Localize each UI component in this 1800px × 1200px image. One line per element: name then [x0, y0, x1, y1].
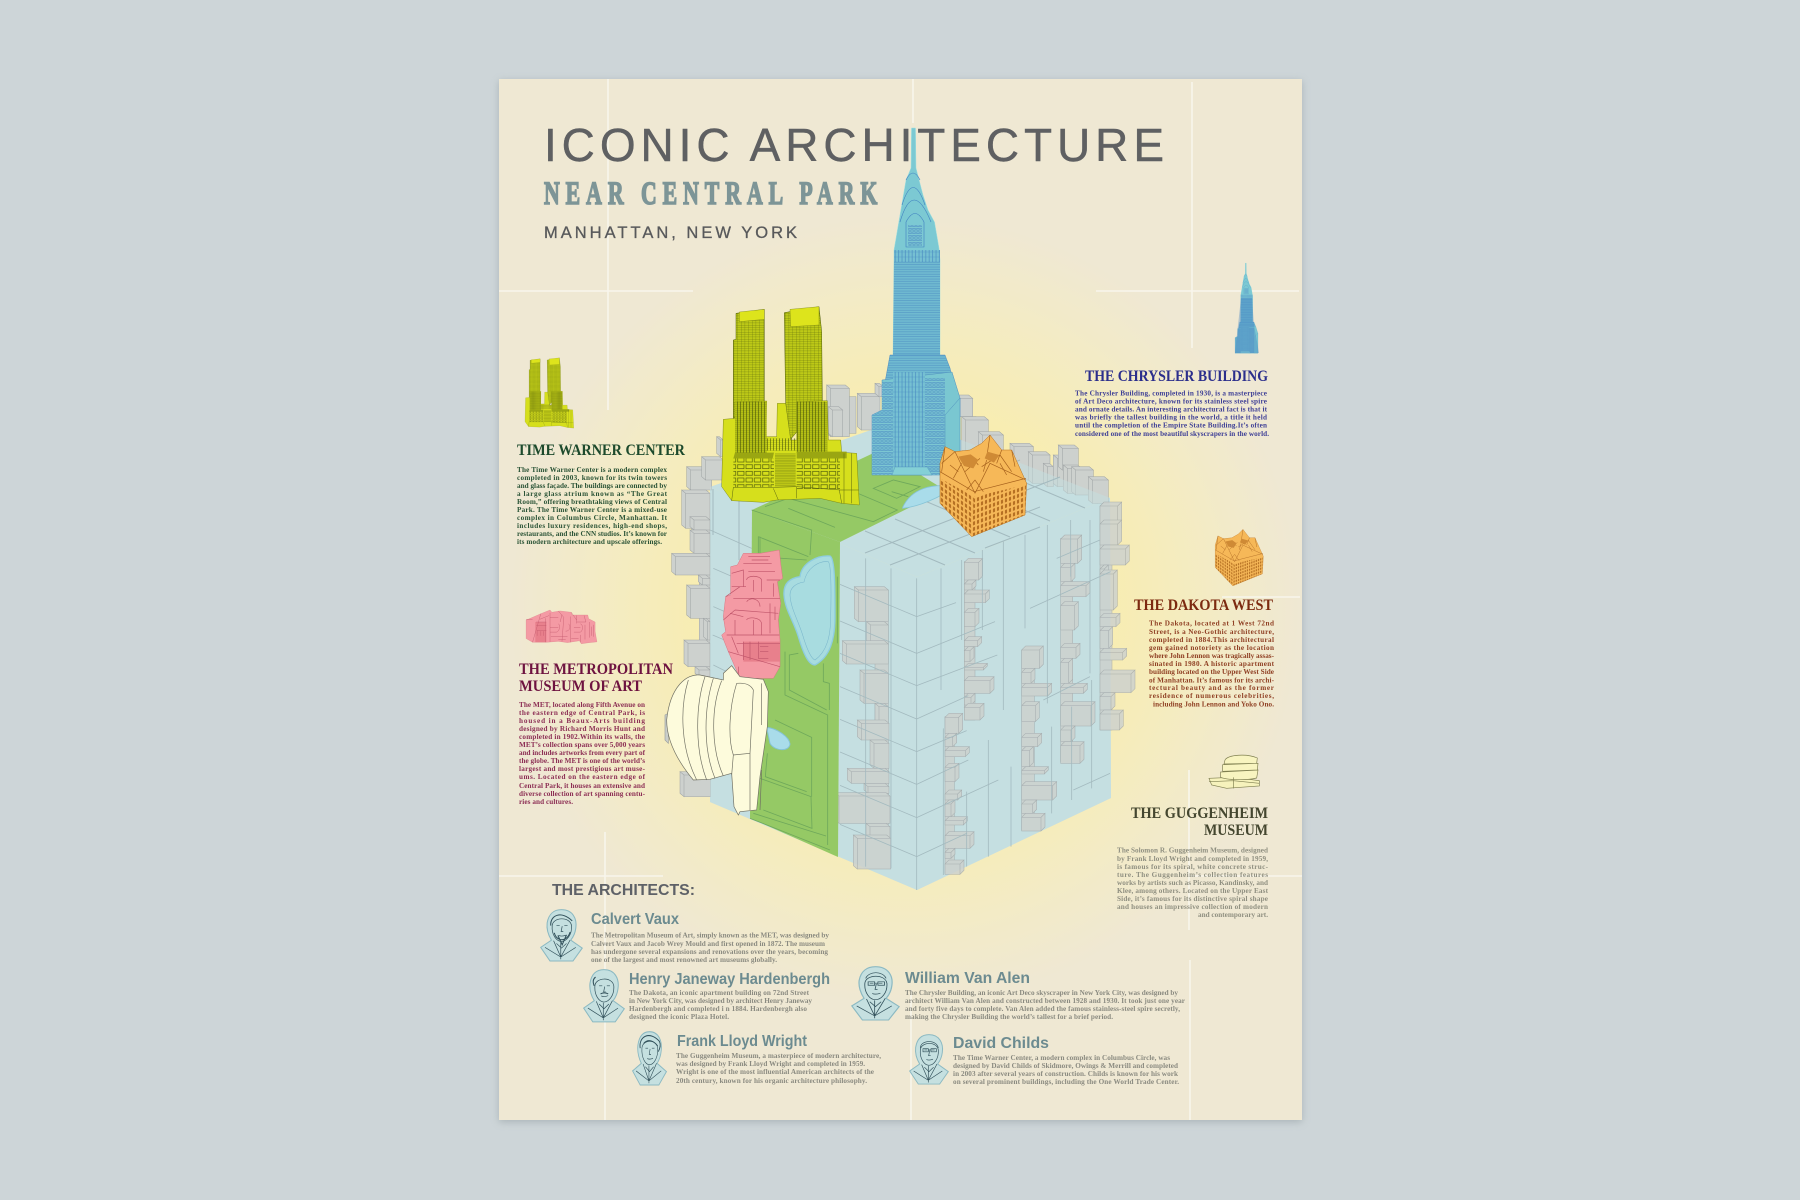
text: The Dakota description: of Manhattan. It’s famous for its archi-: [1149, 676, 1275, 684]
text: Henry Janeway Hardenbergh bio: The Dakota, an iconic apartment building on 72nd Street: [629, 989, 810, 997]
text: Guggenheim Museum description: works by artists such as Picasso, Kandinsky, and: [1117, 879, 1268, 887]
text: David Childs bio: The Time Warner Center, a modern complex in Columbus Circle, was: [953, 1054, 1170, 1062]
portrait: Henry Janeway Hardenbergh: [584, 970, 624, 1022]
name: David Childs: David Childs: [953, 1035, 1049, 1052]
text: Time Warner Center description: complex in Columbus Circle, Manhattan. It: [517, 514, 668, 522]
text: Frank Lloyd Wright bio: 20th century, known for his organic architecture philosophy.: [676, 1077, 867, 1085]
text: The Dakota description: The Dakota, located at 1 West 72nd: [1149, 620, 1274, 628]
text: Chrysler Building description: of Art Deco architecture, known for its stainless steel spire: [1075, 398, 1267, 406]
subtitle: NEAR CENTRAL PARK: [544, 176, 878, 212]
building: Guggenheim Museum: [665, 666, 768, 815]
text: Metropolitan Museum description: Central Park, it houses an extensive and: [519, 782, 645, 790]
text: Frank Lloyd Wright bio: Wright is one of the most influential American architects of the: [676, 1068, 874, 1076]
name: Calvert Vaux: Calvert Vaux: [591, 911, 679, 928]
panel: The Dakota West: [1134, 529, 1275, 708]
heading: Chrysler Building: THE CHRYSLER BUILDING: [1085, 368, 1268, 385]
heading: Guggenheim Museum: MUSEUM: [1204, 822, 1268, 839]
text: Time Warner Center description: its modern architecture and upscale offerings.: [517, 538, 662, 546]
text: Guggenheim Museum description: and contemporary art.: [1198, 911, 1268, 919]
text: Chrysler Building description: The Chrysler Building, completed in 1930, is a masterpiece: [1075, 390, 1267, 398]
gray buildings on right face: [835, 502, 1135, 874]
heading: Guggenheim Museum: [1131, 805, 1268, 839]
reservoir pond: [784, 556, 835, 665]
text: William Van Alen bio: [905, 989, 1186, 1021]
text: Guggenheim Museum description: by Frank Lloyd Wright and completed in 1959,: [1117, 855, 1268, 863]
text: Metropolitan Museum description: the globe. The MET is one of the world’s: [519, 757, 645, 765]
building: Chrysler Building: [872, 128, 960, 475]
heading: Time Warner Center: TIME WARNER CENTER: [517, 442, 685, 459]
heading: Metropolitan Museum of Art: [519, 661, 673, 695]
architect: William Van Alen: [852, 967, 1186, 1021]
text: William Van Alen bio: and forty five days to complete. Van Alen added the famous stainless-steel spire secretly,: [905, 1005, 1180, 1013]
icon: Chrysler Building: [1235, 263, 1259, 353]
text: The Dakota description: residence of numerous celebrities,: [1149, 692, 1274, 700]
text: Metropolitan Museum description: largest and most prestigious art muse-: [519, 765, 646, 773]
building: Time Warner Center: [722, 307, 859, 505]
text: Time Warner Center description: Park. The Time Warner Center is a mixed-use: [517, 506, 667, 514]
text: Metropolitan Museum description: completed in 1902.Within its walls, the: [519, 733, 645, 741]
location line: MANHATTAN, NEW YORK: [544, 224, 797, 242]
solid cube base: [710, 418, 1111, 890]
text: Time Warner Center description: a large glass atrium known as “The Great: [517, 490, 668, 498]
text: Time Warner Center description: completed in 2003, known for its twin towers: [517, 474, 667, 482]
name: Frank Lloyd Wright: Frank Lloyd Wright: [677, 1033, 807, 1050]
text: Henry Janeway Hardenbergh bio: in New York City, was designed by architect Henry Janeway: [629, 997, 812, 1005]
text: Time Warner Center description: restaurants, and the CNN studios. It’s known for: [517, 530, 668, 538]
text: David Childs bio: designed by David Childs of Skidmore, Owings & Merrill and completed: [953, 1062, 1178, 1070]
central park green strip: [750, 450, 945, 857]
text: Chrysler Building description: was briefly the tallest building in the world, a title it held: [1075, 414, 1267, 422]
text: Henry Janeway Hardenbergh bio: Hardenbergh and completed i n 1884. Hardenbergh also: [629, 1005, 807, 1013]
portrait: William Van Alen: [852, 967, 899, 1020]
text: Time Warner Center description: Room,” offering breathtaking views of Central: [517, 498, 667, 506]
heading: Guggenheim Museum: THE GUGGENHEIM: [1131, 805, 1268, 822]
title: ICONIC ARCHITECTURE: [544, 119, 1164, 171]
panel: Time Warner Center: [517, 358, 685, 546]
name: William Van Alen: William Van Alen: [905, 970, 1030, 987]
text: The Dakota description: gem gained notoriety as the location: [1149, 644, 1274, 652]
text: Time Warner Center description: includes luxury residences, high-end shops,: [517, 522, 667, 530]
text: David Childs bio: in 2003 after several years of construction. Childs is known for his work: [953, 1070, 1178, 1078]
text: Guggenheim Museum description: is famous for its spiral, white concrete struc-: [1117, 863, 1269, 871]
text: Metropolitan Museum description: diverse collection of art spanning centu-: [519, 790, 646, 798]
text: Guggenheim Museum description: The Solomon R. Guggenheim Museum, designed: [1117, 846, 1268, 854]
panel: Guggenheim Museum: [1117, 755, 1269, 919]
text: Metropolitan Museum description: designed by Richard Morris Hunt and: [519, 725, 645, 733]
heading: The Architects: THE ARCHITECTS:: [552, 882, 695, 899]
text: Calvert Vaux bio: Calvert Vaux and Jacob Wrey Mould and first opened in 1872. The museum: [591, 940, 825, 948]
text: Metropolitan Museum description: housed in a Beaux-Arts building: [519, 717, 645, 725]
text: Calvert Vaux bio: The Metropolitan Museum of Art, simply known as the MET, was designed by: [591, 932, 829, 940]
isometric city cube: [665, 128, 1135, 890]
back and edge gray buildings: [672, 383, 1108, 797]
heading: Metropolitan Museum of Art: MUSEUM OF ART: [519, 678, 642, 695]
text: Metropolitan Museum description: and includes artworks from every part of: [519, 749, 646, 757]
pond on top face: [903, 486, 953, 508]
text: Time Warner Center description: [517, 466, 668, 546]
text: Henry Janeway Hardenbergh bio: [629, 989, 812, 1021]
architect: Frank Lloyd Wright: [633, 1032, 881, 1085]
text: Guggenheim Museum description: Klee, among others. Located on the Upper East: [1117, 887, 1269, 895]
building: The Dakota: [940, 435, 1027, 537]
heading: Metropolitan Museum of Art: THE METROPOLITAN: [519, 661, 673, 678]
text: Metropolitan Museum description: ries and cultures.: [519, 798, 573, 806]
icon: Metropolitan Museum: [526, 610, 597, 644]
text: Metropolitan Museum description: [519, 701, 646, 806]
text: Chrysler Building description: until the completion of the Empire State Building.It’s often: [1075, 422, 1267, 430]
text: The Dakota description: tectural beauty and as the former: [1149, 684, 1275, 692]
text: Metropolitan Museum description: the eastern edge of Central Park, is: [519, 709, 645, 717]
text: William Van Alen bio: The Chrysler Building, an iconic Art Deco skyscraper in New York City, was designed by: [905, 989, 1178, 997]
text: Guggenheim Museum description: and houses an impressive collection of modern: [1117, 903, 1268, 911]
text: The Dakota description: [1149, 620, 1275, 708]
text: Frank Lloyd Wright bio: The Guggenheim Museum, a masterpiece of modern architecture,: [676, 1052, 881, 1060]
portrait: David Childs: [910, 1035, 948, 1084]
text: The Dakota description: Street, is a Neo-Gothic architecture,: [1149, 628, 1274, 636]
text: David Childs bio: [953, 1054, 1179, 1086]
panel: Metropolitan Museum of Art: [519, 610, 673, 806]
poster shadow: [499, 81, 1302, 1122]
text: Calvert Vaux bio: [591, 932, 829, 964]
text: Metropolitan Museum description: The MET, located along Fifth Avenue on: [519, 701, 645, 709]
name: Henry Janeway Hardenbergh: Henry Janeway Hardenbergh: [629, 971, 830, 988]
text: Guggenheim Museum description: Side, it’s famous for its distinctive spiral shape: [1117, 895, 1268, 903]
text: William Van Alen bio: making the Chrysler Building the world’s tallest for a brief period.: [905, 1013, 1113, 1021]
panel: Chrysler Building: [1075, 263, 1269, 438]
text: Frank Lloyd Wright bio: was designed by Frank Lloyd Wright and completed in 1959.: [676, 1060, 865, 1068]
text: Metropolitan Museum description: ums. Located on the eastern edge of: [519, 773, 646, 781]
text: William Van Alen bio: architect William Van Alen and constructed between 1928 and 1930. It took just one year: [905, 997, 1186, 1005]
text: The Dakota description: completed in 1884.This architectural: [1149, 636, 1274, 644]
architect: Henry Janeway Hardenbergh: [584, 970, 830, 1022]
translucent cube faces: [710, 418, 1111, 890]
text: Chrysler Building description: and ornate details. An interesting architectural fact is that it: [1075, 406, 1268, 414]
text: Guggenheim Museum description: [1117, 846, 1269, 919]
small pond: [767, 727, 790, 750]
text: Metropolitan Museum description: MET’s collection spans over 5,000 years: [519, 741, 645, 749]
building: Metropolitan Museum: [722, 550, 783, 678]
text: Chrysler Building description: [1075, 390, 1269, 438]
architect: Calvert Vaux: [541, 910, 829, 964]
text: Frank Lloyd Wright bio: [676, 1052, 881, 1085]
portrait: Frank Lloyd Wright: [633, 1032, 666, 1085]
text: Calvert Vaux bio: one of the largest and most renowned art museums globally.: [591, 956, 777, 964]
icon: The Dakota: [1215, 529, 1263, 586]
text: David Childs bio: on several prominent buildings, including the One World Trade Center.: [953, 1078, 1179, 1086]
text: Guggenheim Museum description: ture. The Guggenheim’s collection features: [1117, 871, 1268, 879]
text: The Dakota description: including John Lennon and Yoko Ono.: [1153, 700, 1274, 708]
text: The Dakota description: where John Lennon was tragically assas-: [1149, 652, 1275, 660]
portrait: Calvert Vaux: [541, 910, 582, 961]
text: The Dakota description: building located on the Upper West Side: [1149, 668, 1274, 676]
poster background: [499, 79, 1302, 1120]
text: Chrysler Building description: considered one of the most beautiful skyscrapers in the world.: [1075, 430, 1269, 438]
text: Time Warner Center description: and glass façade. The buildings are connected by: [517, 482, 667, 490]
text: The Dakota description: sinated in 1980. A historic apartment: [1149, 660, 1275, 668]
text: Time Warner Center description: The Time Warner Center is a modern complex: [517, 466, 667, 474]
heading: The Dakota West: THE DAKOTA WEST: [1134, 597, 1273, 614]
icon: Time Warner Center: [525, 358, 574, 428]
text: Calvert Vaux bio: has undergone several expansions and renovations over the years, becoming: [591, 948, 828, 956]
text: Henry Janeway Hardenbergh bio: designed the iconic Plaza Hotel.: [629, 1013, 729, 1021]
architect: David Childs: [910, 1035, 1179, 1086]
icon: Guggenheim Museum: [1209, 755, 1259, 788]
